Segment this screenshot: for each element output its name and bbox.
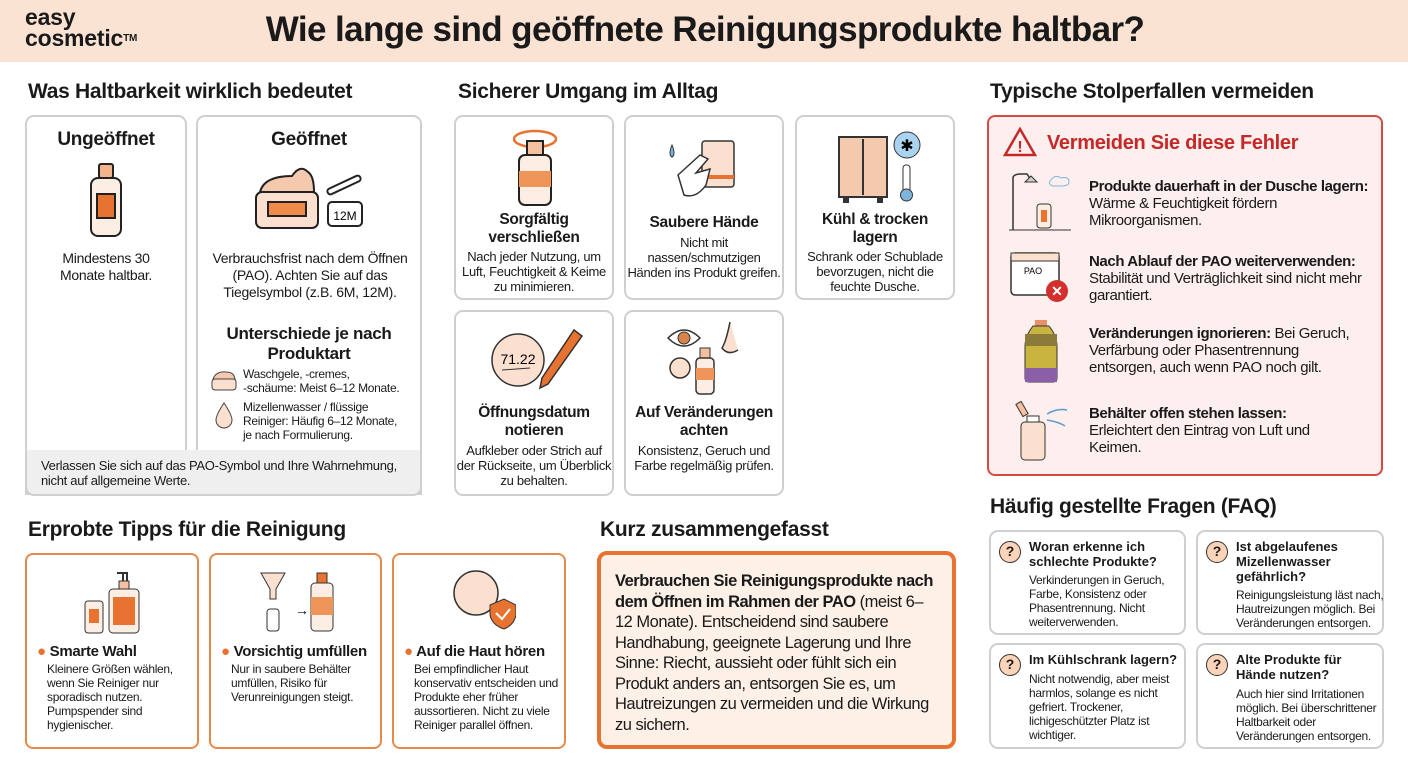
icon: funnel: →: [295, 602, 309, 618]
heading: Stolperfallen: Typische Stolperfallen vermeiden: [990, 80, 1314, 103]
icon: funnel: [260, 572, 334, 632]
heading: FAQ: Häufig gestellte Fragen (FAQ): [990, 495, 1277, 518]
icon: drop: [216, 402, 232, 428]
heading: Erprobte Tipps: Erprobte Tipps für die Reinigung: [28, 518, 346, 541]
panel: summary: Verbrauchen Sie Reinigungsprodukte nach dem Öffnen im Rahmen der PAO (meist 6–12 Monate). Entscheidend sind saubere Handhabung, geeignete Lagerung und Ihre Sinne: Riecht, aussieht oder fühlt sich ein Produkt anders an, entsorgen Sie es, um Hautreizungen zu vermeiden und die Wirkung zu sichern.: [615, 572, 933, 734]
icon: bottle: [90, 163, 122, 237]
item: Dusche: [1009, 173, 1368, 230]
item: PAO: Nach Ablauf der PAO weiterverwenden: Stabilität und Verträglichkeit sind nicht mehr garantiert.: [1089, 253, 1362, 304]
faq 4: [1196, 643, 1384, 749]
card: Sorgfältig verschließen: [454, 115, 614, 300]
item: offen: Behälter offen stehen lassen: Erleichtert den Eintrag von Luft und Keimen.: [1089, 405, 1310, 456]
icon: warning: [1003, 127, 1037, 156]
card: Öffnungsdatum: Öffnungsdatum notieren: [478, 404, 590, 439]
faq 2: Ist abgelaufenes Mizellenwasser gefährlich?: [1236, 539, 1338, 584]
card: Smarte Wahl: Kleinere Größen wählen, wenn Sie Reiniger nur sporadisch nutzen. Pumpspender sind hygienischer.: [47, 662, 173, 732]
item: Veränderungen: Veränderungen ignorieren: Bei Geruch, Verfärbung oder Phasentrennung entsorgen, auch wenn PAO noch gilt.: [1089, 325, 1349, 376]
icon: warning: !: [1017, 139, 1023, 156]
card: Auf Veränderungen achten: Konsistenz, Geruch und Farbe regelmäßig prüfen.: [634, 443, 774, 473]
logo: cosmeticTM: [25, 25, 137, 51]
card: Auf Veränderungen achten: Auf Veränderungen achten: [635, 404, 773, 439]
faq 3: ?: [1006, 656, 1014, 672]
faq 1: ?: [1006, 543, 1014, 559]
card: Auf die Haut hören: ● Auf die Haut hören: [404, 643, 545, 660]
icon: hand towel: [670, 140, 735, 197]
card: Öffnungsdatum: Aufkleber oder Strich auf der Rückseite, um Überblick zu behalten.: [457, 443, 611, 488]
item: PAO: PAO: [1024, 266, 1042, 276]
card: Smarte Wahl: ● Smarte Wahl: [37, 643, 137, 660]
icon: eye nose bottle: [667, 322, 738, 395]
card: Geöffnet: Unterschiede je nach Produktart: [226, 324, 392, 363]
card: Ungeöffnet: Ungeöffnet: [57, 129, 155, 150]
card: Kühl & trocken: Kühl & trocken lagern: [822, 211, 928, 246]
title: Wie lange sind geöffnete Reinigungsprodukte haltbar?: [266, 10, 1144, 49]
faq 4: Auch hier sind Irritationen möglich. Bei überschrittener Haltbarkeit oder Veränderungen entsorgen.: [1236, 687, 1376, 743]
card: Saubere Hände: [624, 115, 784, 300]
faq 1: Verkinderungen in Geruch, Farbe, Konsistenz oder Phasentrennung. Nicht weiterverwenden.: [1029, 573, 1164, 629]
card: Geöffnet: Mizellenwasser / flüssige Reiniger: Häufig 6–12 Monate, je nach Formulierung.: [243, 400, 397, 442]
panel: Haltbarkeit: [25, 115, 422, 496]
heading: Was Haltbarkeit: Was Haltbarkeit wirklich bedeutet: [28, 80, 352, 103]
card: Saubere Hände: Nicht mit nassen/schmutzigen Händen ins Produkt greifen.: [627, 235, 781, 280]
card: Geöffnet: Geöffnet: [271, 129, 347, 150]
panel: Fehler: Vermeiden Sie diese Fehler: [1047, 132, 1298, 154]
header band: [0, 0, 1408, 62]
item: Veränderungen: [1024, 320, 1349, 382]
card: Auf Veränderungen achten: [624, 310, 784, 496]
faq 2: [1196, 530, 1384, 635]
logo: easy: [25, 4, 75, 30]
card: Öffnungsdatum: [454, 310, 614, 496]
faq 1: [989, 530, 1186, 635]
card: Geöffnet: Verbrauchsfrist nach dem Öffnen (PAO). Achten Sie auf das Tiegelsymbol (z.B. 6M, 12M).: [212, 250, 408, 300]
card: Ungeöffnet: Monate haltbar.: [60, 267, 152, 283]
icon: sticker pen: 71.22: [500, 351, 536, 367]
card: Auf die Haut hören: Bei empfindlicher Haut konservativ entscheiden und Produkte eher früher aussortieren. Nicht zu viele Reiniger parallel öffnen.: [414, 662, 558, 732]
logo: [25, 4, 137, 51]
icon: small jar: [212, 371, 236, 390]
faq 3: Im Kühlschrank lagern?: [1029, 652, 1177, 667]
card: Vorsichtig umfüllen: ● Vorsichtig umfüllen: [221, 643, 367, 660]
faq 4: ?: [1213, 656, 1221, 672]
card: Ungeöffnet: Mindestens 30: [62, 250, 150, 266]
icon: jar: 12M: [333, 209, 357, 223]
panel: Fehler: [987, 115, 1383, 476]
faq 3: [989, 643, 1186, 749]
item: offen: [1015, 400, 1310, 460]
faq 2: ?: [1213, 543, 1221, 559]
note strip: Verlassen Sie sich auf das PAO-Symbol und Ihre Wahrnehmung, nicht auf allgemeine Werte.: [41, 458, 397, 488]
card: Vorsichtig umfüllen: [209, 553, 382, 749]
card: Geöffnet: -schäume: Meist 6–12 Monate.: [243, 381, 399, 395]
heading: Sicherer Umgang: Sicherer Umgang im Alltag: [458, 80, 718, 103]
note strip: [25, 450, 422, 496]
faq 2: Reinigungsleistung läst nach, Hautreizungen möglich. Bei Veränderungen entsorgen.: [1236, 588, 1383, 630]
icon: jar: [255, 168, 363, 229]
heading: Kurz zusammengefasst: Kurz zusammengefasst: [600, 518, 829, 541]
card: Auf die Haut hören: [392, 553, 566, 749]
icon: bottle cap rotate: [512, 130, 558, 206]
card: Kühl & trocken: [795, 115, 955, 300]
card: Sorgfältig verschließen: Nach jeder Nutzung, um Luft, Feuchtigkeit & Keime zu minimieren.: [462, 249, 606, 294]
faq 1: Woran erkenne ich schlechte Produkte?: [1029, 539, 1157, 569]
item: Dusche: Produkte dauerhaft in der Dusche lagern: Wärme & Feuchtigkeit fördern Mikroorganismen.: [1089, 178, 1368, 229]
item: PAO: ✕: [1051, 283, 1063, 299]
card: Ungeöffnet: [25, 115, 187, 495]
card: Kühl & trocken: Schrank oder Schublade bevorzugen, nicht die feuchte Dusche.: [807, 249, 943, 294]
faq 3: Nicht notwendig, aber meist harmlos, solange es nicht gefriert. Trockener, lichigeschützter Platz ist wichtiger.: [1029, 672, 1169, 742]
icon: pump bottles: [84, 572, 140, 634]
card: Vorsichtig umfüllen: Nur in saubere Behälter umfüllen, Risiko für Verunreinigungen steigt.: [231, 662, 353, 704]
card: Sorgfältig verschließen: Sorgfältig verschließen: [488, 211, 580, 246]
card: Geöffnet: [196, 115, 422, 495]
card: Smarte Wahl: [25, 553, 199, 749]
icon: cabinet: ✱: [900, 138, 914, 155]
icon: face shield: [453, 570, 516, 630]
card: Saubere Hände: Saubere Hände: [650, 214, 758, 231]
card: Geöffnet: Waschgele, -cremes,: [243, 367, 350, 381]
icon: cabinet: [838, 132, 920, 203]
icon: sticker pen: [491, 328, 583, 390]
faq 4: Alte Produkte für Hände nutzen?: [1236, 652, 1341, 682]
